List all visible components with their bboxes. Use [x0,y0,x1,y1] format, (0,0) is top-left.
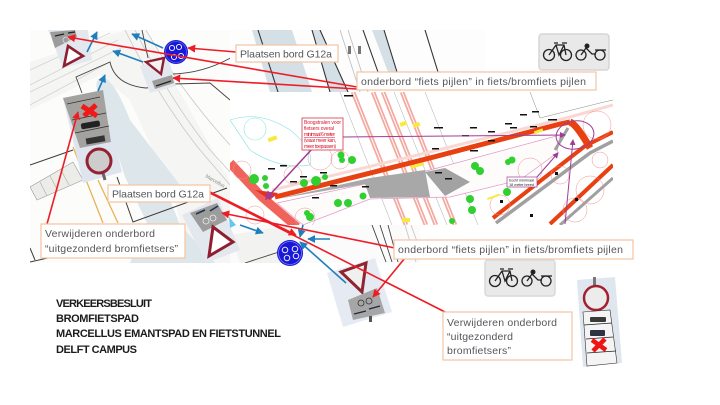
callout: boogstralen: Boogstralen voor [304,120,341,126]
street plan: left part: Marcellus [204,174,226,190]
green trees [249,152,516,224]
street plan: top part [252,30,438,92]
small drawing annotations [268,95,578,217]
title: verkeersbesluit: DELFT CAMPUS [56,344,137,356]
label: onderbord fiets pijlen, top: onderbord “fiets pijlen” in fiets/bromfiets pijlen [361,76,586,88]
icon: bicycle and moped plaque, bottom [485,260,555,296]
main red cycle path [275,122,570,197]
callout: boogstralen: fietsers overal [304,126,334,132]
sign: triangle with arrows, top left [48,30,92,68]
title: verkeersbesluit: VERKEERSBESLUIT [56,298,152,310]
sign: exemption plaque with red cross and no-entry circle, left [63,90,122,183]
label: Verwijderen onderbord, left: Verwijderen onderbord [45,228,155,240]
callout: breedte: 18 meter breed [509,182,534,187]
callout: boogstralen [302,118,343,150]
red circles of trees [233,111,611,228]
label: Plaatsen bord G12a, left: Plaatsen bord G12a [112,188,204,200]
sign: no-entry circle with plaque and red cross, right [577,277,622,367]
sign: blue cycle path circle, bottom [277,240,303,266]
label: Verwijderen onderbord, left: “uitgezonderd bromfietsers” [45,243,178,255]
label: Plaatsen bord G12a, top: Plaatsen bord G12a [240,48,332,60]
sign: blue cycle path circle, top [164,40,188,64]
sign: arrows plaque and triangle, centre left [182,198,240,263]
callout: boogstralen: minimaal 6 meter [304,132,335,138]
title: verkeersbesluit: BROMFIETSPAD [56,313,139,325]
callout: boogstralen: meer toepassen) [304,144,336,150]
red pointer lines [47,37,447,313]
icon: bicycle and moped plaque, top [539,34,609,70]
island [277,135,560,225]
street plan: left part [30,30,234,263]
label: Plaatsen bord G12a, top [236,45,338,62]
label: Verwijderen onderbord, right [443,312,572,360]
title: verkeersbesluit: MARCELLUS EMANTSPAD EN FIETSTUNNEL [56,328,281,340]
label: onderbord fiets pijlen, top [357,72,596,90]
callout: boogstralen: (waar meer kan, [304,138,336,144]
sign: triangle with arrows, top centre [140,57,176,93]
label: Verwijderen onderbord, left [41,224,185,258]
pink rail stripes [340,92,478,225]
label: Verwijderen onderbord, right: “uitgezonderd [447,331,513,343]
street plan: central design drawing [230,92,613,228]
light blue map wedge [229,217,236,228]
label: Verwijderen onderbord, right: bromfietsers” [447,345,512,357]
callout: breedte: bocht minimaal [509,178,534,182]
yellow marks [268,121,543,222]
label: onderbord fiets pijlen, bottom: onderbord “fiets pijlen” in fiets/bromfiets pijlen [398,244,623,256]
sign: triangle with arrows plaque, bottom [327,258,392,327]
label: Plaatsen bord G12a, left [108,185,210,202]
title: verkeersbesluit [56,298,281,356]
blue direction arrows [87,32,346,283]
label: Verwijderen onderbord, right: Verwijderen onderbord [447,317,557,329]
street plan: bottom part [230,225,420,263]
label: onderbord fiets pijlen, bottom [394,240,633,259]
purple annotation lines [266,118,596,224]
callout: breedte [507,177,537,187]
